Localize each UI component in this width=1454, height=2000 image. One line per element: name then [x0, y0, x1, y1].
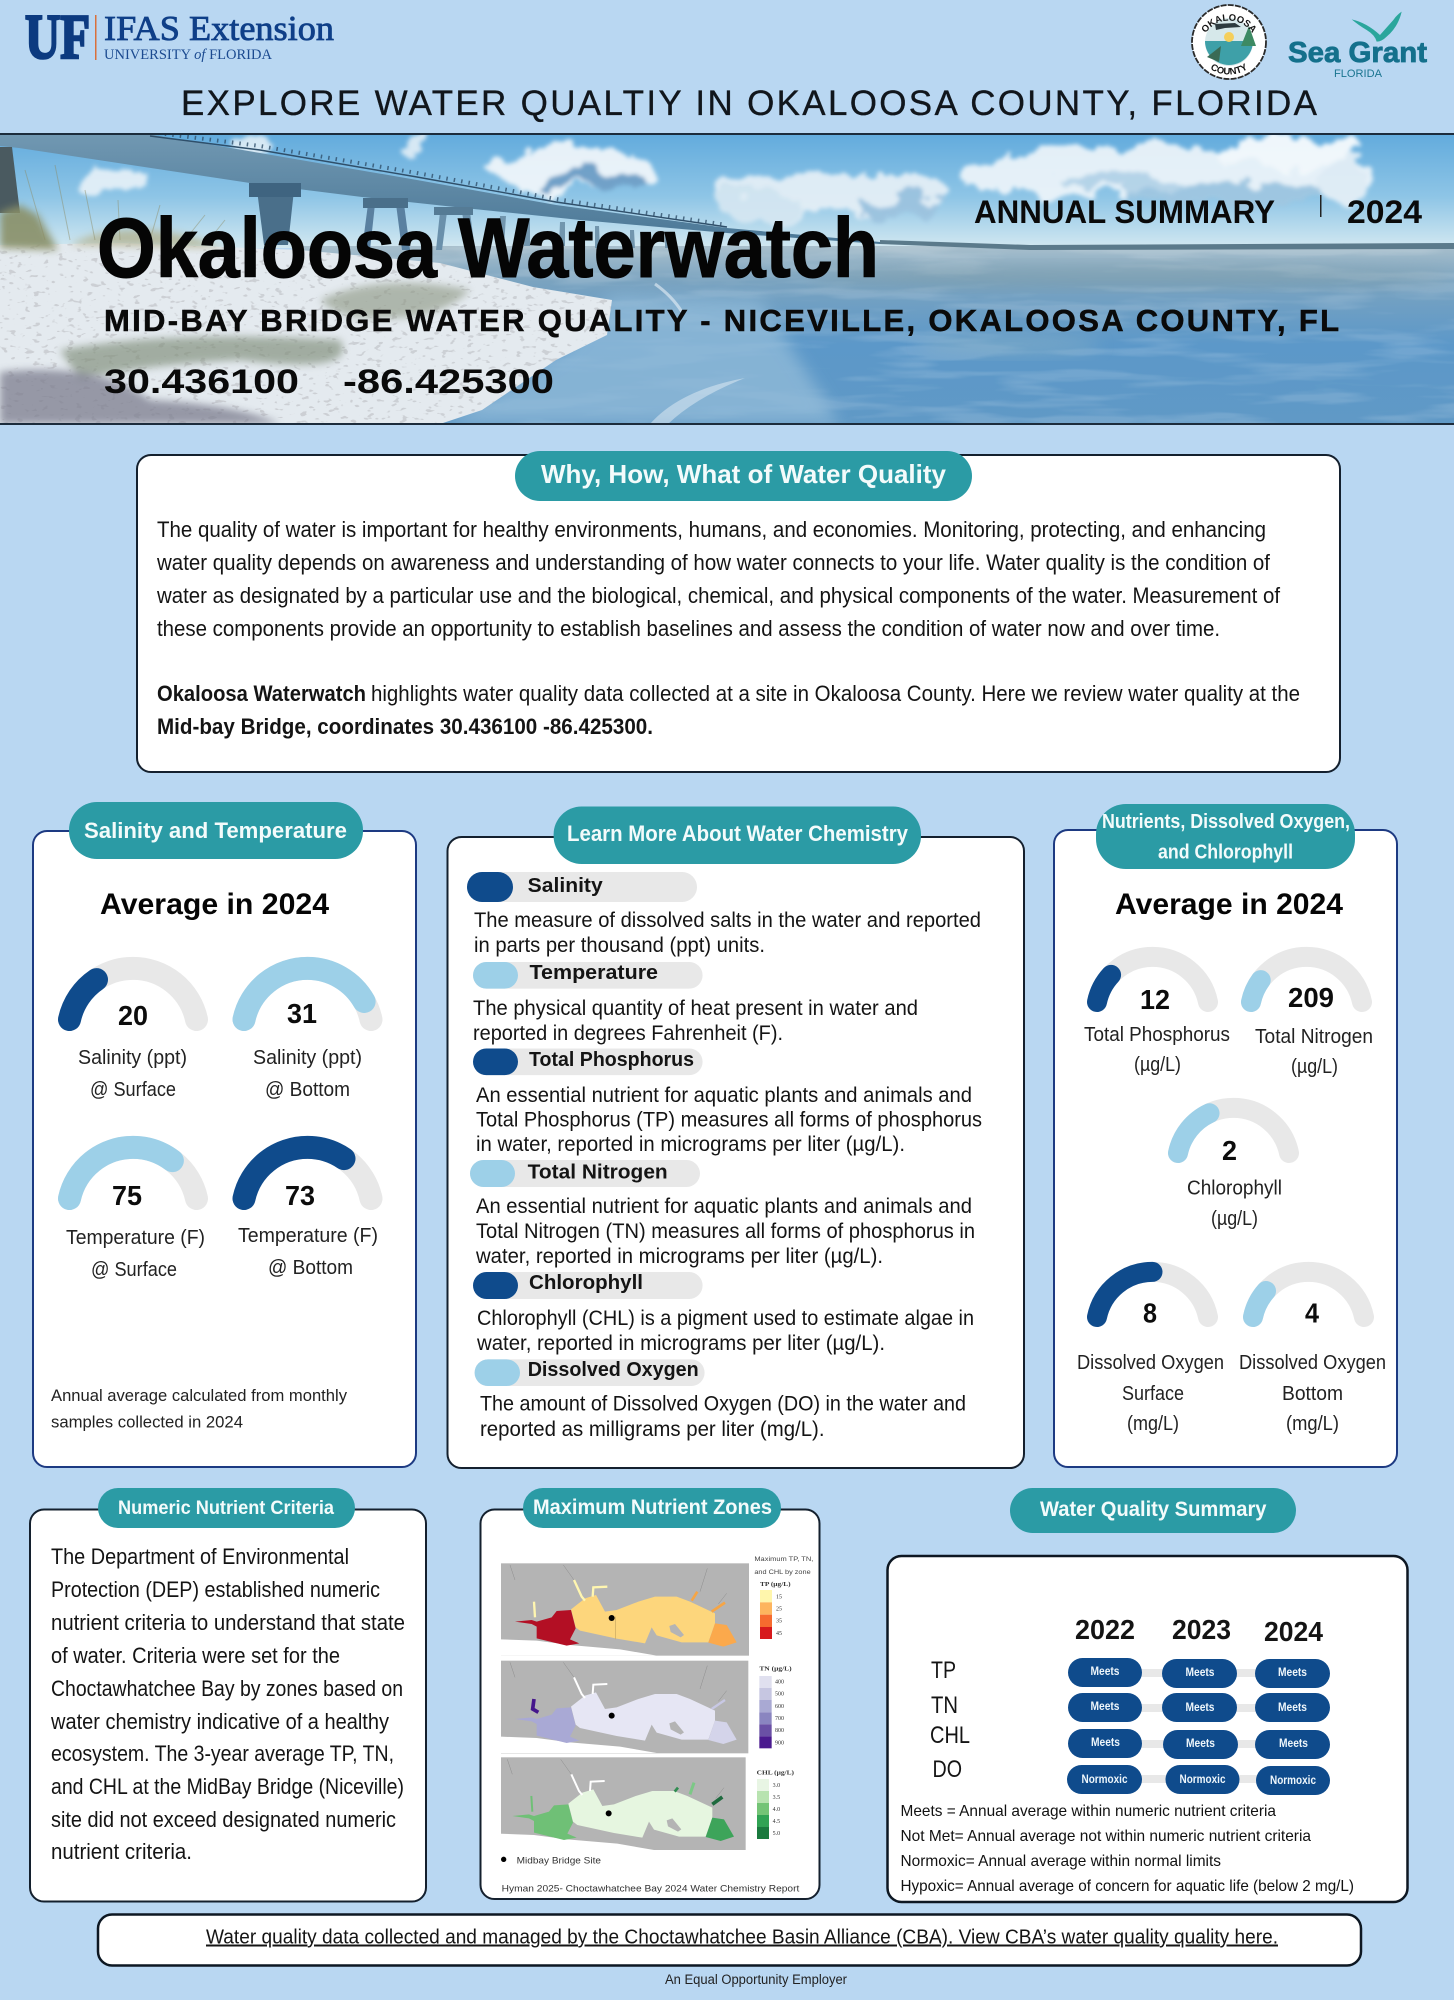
gauge: dissolved oxygen surface 8: 8	[1143, 1298, 1157, 1328]
gauge: temperature bottom 73: 73	[285, 1180, 315, 1211]
hero: clouds	[80, 132, 1370, 219]
text block: criteria explanation: site did not exceed designated numeric	[51, 1807, 396, 1832]
legend: CHL	[757, 1769, 794, 1839]
text block: criteria explanation	[50, 1544, 405, 1864]
text block: intro: The quality of water is important for healthy environments, humans, and economies. Monitoring, protecting, and enhancing	[157, 517, 1266, 542]
hero: border lines	[0, 133, 1454, 425]
legend: TP: 15	[776, 1595, 782, 1601]
gauge: dissolved oxygen surface 8: Surface	[1122, 1383, 1184, 1405]
gauge: total nitrogen 209: (µg/L)	[1291, 1056, 1338, 1078]
heading pill: nutrients: Nutrients, Dissolved Oxygen,	[1102, 811, 1350, 833]
entry: temperature: The physical quantity of heat present in water and	[473, 997, 918, 1020]
legend: CHL: 4.5	[773, 1819, 780, 1825]
map: total nitrogen	[501, 1661, 748, 1753]
heading pill: water chemistry: Learn More About Water Chemistry	[567, 821, 909, 846]
entry: salinity: Salinity	[528, 875, 604, 897]
legend: CHL: 3.0	[773, 1783, 780, 1789]
entry: temperature: reported in degrees Fahrenheit (F).	[473, 1022, 783, 1045]
text block: criteria explanation: of water. Criteria were set for the	[51, 1643, 340, 1668]
hero coordinates	[104, 363, 554, 401]
entry: temperature	[473, 962, 918, 1045]
gauge: temperature surface 75: 75	[112, 1180, 142, 1211]
hero: beach	[0, 165, 620, 424]
table: status pills: Meets	[1186, 1665, 1215, 1679]
entry: total phosphorus: Total Phosphorus (TP) measures all forms of phosphorus	[476, 1108, 982, 1132]
entry: total nitrogen: Total Nitrogen (TN) measures all forms of phosphorus in	[476, 1220, 975, 1243]
heading pill: maximum nutrient zones: Maximum Nutrient Zones	[533, 1496, 772, 1519]
table: year headers: 2022	[1075, 1614, 1135, 1645]
gauge: chlorophyll 2: 2	[1222, 1135, 1237, 1166]
gauge: salinity surface 20: @ Surface	[90, 1079, 176, 1101]
legend: status definitions: Not Met= Annual average not within numeric nutrient criteria	[900, 1828, 1311, 1845]
gauge: dissolved oxygen surface 8	[1077, 1272, 1224, 1435]
legend: CHL: 3.5	[773, 1795, 780, 1801]
entry: chlorophyll: Chlorophyll (CHL) is a pigment used to estimate algae in	[477, 1307, 974, 1330]
heading pill: water quality summary: Water Quality Summary	[1040, 1498, 1267, 1521]
legend: site marker: Midbay Bridge Site	[517, 1855, 601, 1865]
heading pill: maximum nutrient zones	[523, 1488, 781, 1528]
heading pill: nutrients	[1096, 804, 1355, 869]
legend: TP: 25	[776, 1607, 782, 1613]
table: status pills: Meets	[1091, 1735, 1120, 1749]
title: EXPLORE WATER QUALTIY IN OKALOOSA COUNTY, FLORIDA	[181, 84, 1318, 123]
text block: criteria explanation: nutrient criteria.	[51, 1839, 192, 1864]
gauge: salinity surface 20	[70, 968, 196, 1101]
text block: intro: these components provide an opportunity to establish baselines and assess the condition of water now and over time.	[157, 616, 1220, 641]
gauge: dissolved oxygen bottom 4: 4	[1305, 1298, 1319, 1328]
entry: chlorophyll: water, reported in micrograms per liter (µg/L).	[476, 1332, 885, 1355]
entry: dissolved oxygen: reported as milligrams per liter (mg/L).	[480, 1418, 824, 1441]
panel: salinity and temperature	[33, 802, 416, 1467]
table: row labels: CHL	[930, 1722, 970, 1749]
logo: Okaloosa County seal: OKALOOSA	[1202, 14, 1256, 33]
gauge: salinity bottom 31: Salinity (ppt)	[253, 1047, 362, 1069]
legend: TN: 900	[775, 1740, 784, 1746]
gauge: dissolved oxygen bottom 4: (mg/L)	[1286, 1413, 1339, 1435]
gauge: temperature surface 75: Temperature (F)	[66, 1227, 205, 1249]
table: status pills: Normoxic	[1082, 1772, 1128, 1786]
table: status pills: Meets	[1278, 1665, 1307, 1679]
panel: data source footer: Water quality data collected and managed by the Choctawhatchee Basin Alliance (CBA). View CBA’s water quality quality here.	[206, 1926, 1278, 1948]
hero subtitle: site: MID-BAY BRIDGE WATER QUALITY - NICEVILLE, OKALOOSA COUNTY, FL	[104, 303, 1339, 338]
heading pill: numeric nutrient criteria	[98, 1488, 355, 1528]
entry: total phosphorus: Total Phosphorus	[529, 1049, 694, 1071]
text block: site note: highlights water quality data collected at a site in Okaloosa County. Here we review water quality at the	[371, 681, 1300, 706]
heading pill: salinity and temperature: Salinity and Temperature	[84, 818, 347, 843]
entry: total phosphorus: An essential nutrient for aquatic plants and animals and	[476, 1084, 972, 1107]
text block: site note: Okaloosa Waterwatch	[157, 681, 366, 706]
gauge: dissolved oxygen bottom 4: Dissolved Oxygen	[1239, 1352, 1386, 1374]
legend: status definitions: Hypoxic= Annual average of concern for aquatic life (below 2 mg/L)	[900, 1878, 1354, 1895]
gauge: temperature surface 75	[66, 1147, 205, 1281]
map: chlorophyll	[498, 1757, 746, 1850]
legend: TP: 45	[776, 1631, 782, 1637]
logo: Sea Grant Florida: FLORIDA	[1334, 68, 1383, 80]
entry: temperature: Temperature	[530, 962, 658, 984]
legend: CHL: 5.0	[773, 1831, 780, 1837]
entry: total nitrogen: An essential nutrient for aquatic plants and animals and	[476, 1195, 972, 1218]
table: status pills	[1067, 1658, 1330, 1795]
panel: learn more about water chemistry	[448, 806, 1024, 1468]
heading pill: numeric nutrient criteria: Numeric Nutrient Criteria	[118, 1498, 334, 1519]
gauge: total phosphorus 12: Total Phosphorus	[1084, 1024, 1230, 1046]
text block: intro: water quality depends on awareness and understanding of how water connects to your life. Water quality is the condition of	[156, 550, 1271, 575]
logo: UF IFAS Extension	[25, 1, 334, 72]
entry: chlorophyll: Chlorophyll	[529, 1272, 643, 1294]
text block: criteria explanation: Choctawhatchee Bay by zones based on	[51, 1676, 403, 1701]
entry: total nitrogen	[470, 1160, 975, 1268]
logo: Sea Grant Florida: Sea Grant	[1288, 37, 1427, 69]
entry: total phosphorus: in water, reported in micrograms per liter (µg/L).	[476, 1133, 905, 1156]
heading pill: nutrients: and Chlorophyll	[1158, 842, 1293, 864]
entry: dissolved oxygen	[475, 1359, 966, 1441]
legend: status definitions: Normoxic= Annual average within normal limits	[900, 1853, 1221, 1870]
legend: CHL: CHL (µg/L)	[757, 1769, 794, 1776]
legend: TN: TN (µg/L)	[759, 1666, 792, 1673]
hero: bridge	[0, 132, 880, 250]
text block: site note	[157, 681, 1300, 739]
heading: average in 2024: Average in 2024	[1115, 888, 1343, 921]
entry: chlorophyll	[473, 1272, 974, 1355]
table: row labels	[930, 1657, 970, 1783]
maps group	[498, 1557, 814, 1894]
entry: dissolved oxygen: Dissolved Oxygen	[528, 1359, 699, 1381]
table: year headers	[1075, 1614, 1323, 1647]
table: status pills: Meets	[1090, 1699, 1120, 1713]
gauge: total nitrogen 209	[1251, 957, 1373, 1078]
gauge: salinity surface 20: Salinity (ppt)	[78, 1047, 187, 1069]
entry: total phosphorus	[473, 1048, 982, 1156]
heading pill: water quality summary	[1010, 1488, 1296, 1533]
gauge: salinity bottom 31: 31	[287, 998, 317, 1029]
legend: TP	[760, 1581, 791, 1639]
map: total phosphorus	[501, 1563, 749, 1656]
legend: TP: 35	[776, 1619, 782, 1625]
legend: status definitions	[900, 1803, 1354, 1895]
panel: why how what	[137, 451, 1340, 772]
entry: salinity: in parts per thousand (ppt) units.	[474, 934, 765, 957]
panel: data source footer	[98, 1914, 1361, 1966]
hero label: annual summary: ANNUAL SUMMARY	[974, 194, 1275, 230]
legend: TP: TP (µg/L)	[760, 1581, 791, 1588]
table: year headers: 2024	[1264, 1616, 1323, 1647]
logo: Sea Grant Florida	[1288, 12, 1427, 80]
table: status pills: Normoxic	[1270, 1773, 1316, 1787]
hero banner: bridge and beach photo	[0, 132, 1454, 426]
hero heading: Okaloosa Waterwatch: Okaloosa Waterwatch	[97, 201, 879, 295]
note: annual average	[51, 1386, 347, 1432]
text block: criteria explanation: and CHL at the MidBay Bridge (Niceville)	[51, 1774, 404, 1799]
heading pill: why how what: Why, How, What of Water Quality	[541, 459, 947, 489]
hero coordinates: -86.425300	[343, 363, 554, 401]
legend: TN: 500	[775, 1692, 784, 1698]
gauge: salinity surface 20: 20	[118, 1000, 148, 1031]
gauge: total nitrogen 209: 209	[1288, 982, 1334, 1013]
text block: criteria explanation: nutrient criteria to understand that state	[51, 1610, 405, 1635]
footer: equal opportunity employer: An Equal Opportunity Employer	[665, 1972, 847, 1987]
gauge: dissolved oxygen bottom 4: Bottom	[1282, 1383, 1343, 1405]
gauge: dissolved oxygen surface 8: (mg/L)	[1127, 1413, 1179, 1435]
map source citation: Hyman 2025- Choctawhatchee Bay 2024 Water Chemistry Report	[502, 1884, 800, 1894]
entry: salinity	[467, 872, 981, 957]
gauge: total phosphorus 12: (µg/L)	[1134, 1054, 1181, 1076]
gauge: salinity bottom 31: @ Bottom	[265, 1079, 350, 1101]
hero coordinates: 30.436100	[104, 363, 299, 401]
gauge: dissolved oxygen bottom 4	[1239, 1272, 1386, 1435]
note: annual average: samples collected in 2024	[51, 1412, 243, 1432]
table: connector bars	[1140, 1669, 1258, 1783]
gauge: temperature bottom 73: @ Bottom	[268, 1257, 353, 1279]
gauge: total nitrogen 209: Total Nitrogen	[1255, 1026, 1373, 1048]
logo: UF IFAS Extension: UF	[25, 1, 90, 72]
logo: UF IFAS Extension: IFAS Extension	[104, 9, 334, 48]
table: row labels: TP	[931, 1657, 956, 1684]
heading pill: why how what	[515, 451, 972, 501]
hero: water	[300, 246, 1454, 426]
entry: dissolved oxygen: The amount of Dissolved Oxygen (DO) in the water and	[480, 1393, 966, 1416]
heading pill: water chemistry	[554, 806, 921, 864]
hero label: year: 2024	[1347, 194, 1422, 230]
logo: Okaloosa County seal	[1191, 4, 1267, 80]
entry: total nitrogen: water, reported in micrograms per liter (µg/L).	[475, 1245, 883, 1268]
gauge: total phosphorus 12: 12	[1140, 984, 1170, 1015]
hero: far shore	[880, 240, 1454, 250]
legend: title	[754, 1557, 814, 1576]
table: year headers: 2023	[1172, 1614, 1231, 1645]
gauge: chlorophyll 2: (µg/L)	[1211, 1208, 1258, 1230]
panel: numeric nutrient criteria	[30, 1488, 426, 1902]
note: annual average: Annual average calculated from monthly	[51, 1386, 347, 1405]
text block: criteria explanation: ecosystem. The 3-year average TP, TN,	[51, 1741, 394, 1766]
gauge: temperature bottom 73: Temperature (F)	[238, 1225, 378, 1247]
logo: Okaloosa County seal: COUNTY	[1211, 63, 1246, 74]
text block: criteria explanation: Protection (DEP) established numeric	[51, 1577, 380, 1602]
hero divider tick	[1320, 195, 1322, 217]
legend: TN: 600	[775, 1704, 784, 1710]
gauge: total phosphorus 12	[1084, 957, 1230, 1076]
gauge: temperature surface 75: @ Surface	[91, 1259, 177, 1281]
text block: intro: water as designated by a particular use and the biological, chemical, and physical components of the water. Measurement of	[156, 583, 1281, 608]
text block: criteria explanation: The Department of Environmental	[51, 1544, 349, 1569]
table: status pills: Meets	[1090, 1664, 1120, 1678]
gauge: salinity bottom 31	[244, 968, 371, 1101]
text block: site note: Mid-bay Bridge, coordinates 30.436100 -86.425300.	[157, 714, 653, 739]
gauge: dissolved oxygen surface 8: Dissolved Oxygen	[1077, 1352, 1224, 1374]
heading: average in 2024: Average in 2024	[100, 888, 329, 921]
legend: title: Maximum TP, TN,	[754, 1557, 814, 1563]
heading pill: salinity and temperature	[69, 802, 363, 859]
table: status pills: Meets	[1186, 1736, 1215, 1750]
legend: TN: 700	[775, 1716, 784, 1722]
panel: water quality summary	[888, 1556, 1408, 1902]
table: row labels: DO	[932, 1756, 962, 1783]
legend: status definitions: Meets = Annual average within numeric nutrient criteria	[900, 1803, 1276, 1820]
legend: TN: 800	[775, 1728, 784, 1734]
panel: maximum nutrient zones	[480, 1488, 820, 1899]
table: status pills: Meets	[1278, 1700, 1307, 1714]
text block: criteria explanation: water chemistry indicative of a healthy	[50, 1709, 389, 1734]
gauge: chlorophyll 2	[1178, 1108, 1289, 1230]
table: status pills: Meets	[1186, 1700, 1215, 1714]
entry: salinity: The measure of dissolved salts in the water and reported	[474, 909, 981, 932]
legend: CHL: 4.0	[773, 1807, 780, 1813]
logo: UF IFAS Extension: UNIVERSITY of FLORIDA	[104, 47, 272, 63]
panel: nutrients, dissolved oxygen, chlorophyll	[1054, 804, 1397, 1467]
gauge: chlorophyll 2: Chlorophyll	[1187, 1178, 1282, 1200]
legend: TN: 400	[775, 1680, 784, 1686]
table: row labels: TN	[931, 1692, 958, 1719]
legend: title: and CHL by zone	[754, 1570, 811, 1576]
table: status pills: Meets	[1279, 1736, 1308, 1750]
text block: intro	[156, 517, 1281, 641]
entry: total nitrogen: Total Nitrogen	[528, 1162, 668, 1184]
gauge: temperature bottom 73	[238, 1147, 378, 1279]
table: status pills: Normoxic	[1180, 1772, 1226, 1786]
legend: TN	[759, 1666, 792, 1748]
